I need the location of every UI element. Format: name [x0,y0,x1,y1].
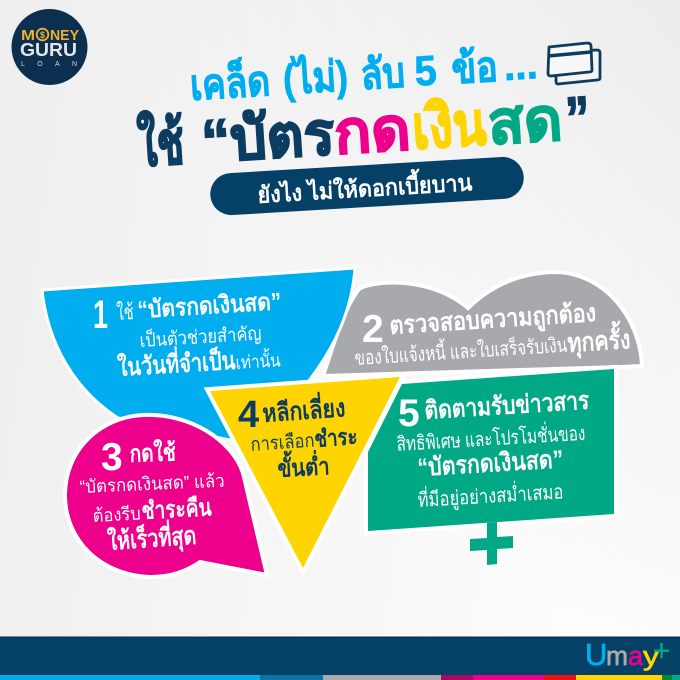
title line 1: 5 [413,47,438,95]
panel 5: green sign: สิทธิพิเศษ และโปรโมชั่นของ [396,419,586,456]
panel 5: green sign: “บัตรกดเงินสด” [417,445,564,482]
title line 2: “บัตร [199,100,336,175]
brand: Umay+: a [628,641,644,671]
logo: Money Guru Loan: $ [40,30,45,40]
panel 3: pink speech bubble: ให้เร็วที่สุด [106,518,197,558]
panel 3: pink speech bubble [65,415,267,577]
panel 3: pink speech bubble: “บัตรกดเงินสด” แล้ว [79,471,225,497]
brand: Umay+: U [585,637,607,672]
subtitle pill [209,156,525,216]
panel 2: grey cloud: ตรวจสอบความถูกต้อง [389,299,597,342]
title line 2: สด [486,85,564,157]
title line 1 [188,38,539,109]
panel 1: blue: ในวันที่จำเป็น [116,343,236,382]
title line 1: ... [502,40,539,89]
panel 3: pink speech bubble: 3 [101,436,123,479]
panel 4: yellow triangle: 4 [238,394,259,436]
title line 2 [136,83,592,179]
icon: green plus [470,522,513,565]
title line 1: ข้อ [450,43,499,92]
brand: Umay+: y [643,641,660,671]
subtitle pill: ยังไง ไม่ให้ดอกเบี้ยบาน [257,165,473,208]
brand: Umay+ [585,637,669,672]
panel 1: blue: ใช้ [116,300,134,325]
panel 3: pink speech bubble: ต้องรีบ [92,504,141,526]
panel 2: grey cloud: ของใบแจ้งหนี้ และใบเสร็จรับเงิน [354,331,568,370]
panel 2: grey cloud [323,272,642,376]
panel 1: blue: “บัตรกดเงินสด” [137,288,282,324]
logo: Money Guru Loan: M [21,27,35,44]
logo: Money Guru Loan: GURU [20,40,77,60]
logo: Money Guru Loan: NEY [50,27,79,44]
panel 3: pink speech bubble: กดใช้ [129,437,176,468]
panel 4: yellow triangle: ขั้นต่ำ [277,447,330,483]
panel 3: pink speech bubble: ชำระคืน [141,494,213,525]
brand: Umay+: m [606,641,628,671]
logo: Money Guru Loan: LOAN [21,61,77,68]
panel 2: grey cloud: 2 [362,308,384,351]
title line 1: เคล็ด [188,55,271,109]
panel 1: blue [42,268,355,440]
panel 1: blue: 1 [93,293,108,337]
title line 2: กด [332,95,412,167]
title line 1: (ไม่) [281,51,349,103]
logo: Money Guru Loan [12,9,88,85]
title line 1: ลับ [359,49,406,98]
panel 5: green sign: ติดตามรับข่าวสาร [424,387,591,425]
panel 1: blue: เท่านั้น [235,347,281,373]
panel 2: grey cloud: ทุกครั้ง [566,319,631,360]
panel 5: green sign: 5 [398,392,420,435]
panel 4: yellow triangle: หลีกเลี่ยง [261,390,346,428]
panel 4: yellow triangle: การเลือก [250,431,315,456]
panel 4: yellow triangle [210,377,400,568]
panel 4: yellow triangle: ชำระ [314,423,358,452]
icon: credit cards [548,43,600,84]
title line 2: ” [564,84,592,152]
panel 5: green sign: ที่มีอยู่อย่างสม่ำเสมอ [417,477,564,513]
title line 2: ใช้ [136,108,186,179]
title line 2: เงิน [410,90,488,162]
footer bar [0,636,680,680]
panel 5: green sign [368,369,614,531]
panel 1: blue: เป็นตัวช่วยสำคัญ [139,321,262,352]
